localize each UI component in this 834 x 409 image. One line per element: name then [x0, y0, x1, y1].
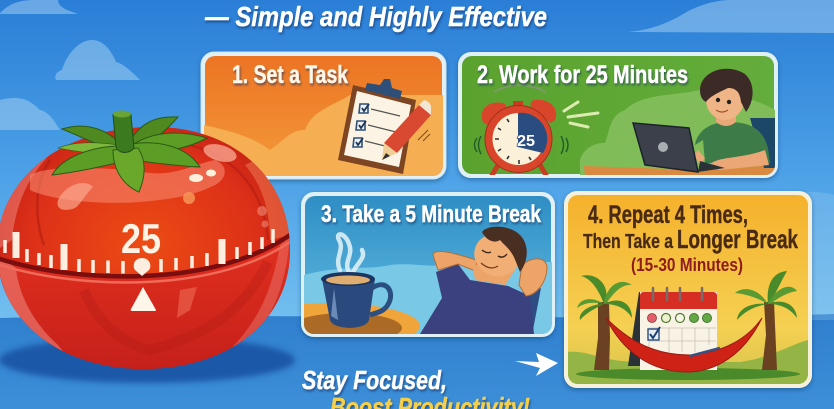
step 4 heading line 1: 4. Repeat 4 Times,: [588, 201, 748, 229]
tagline line 1: Stay Focused,: [302, 365, 447, 395]
subtitle: — Simple and Highly Effective: [204, 1, 547, 32]
panel: step 2 work for 25 minutes: [458, 52, 780, 178]
panel: step 1 set a task: [201, 52, 446, 180]
illustration: hammock: [606, 318, 762, 372]
panel: step 3 take a 5 minute break: [298, 192, 558, 341]
arrow: [515, 353, 558, 376]
dial number: 25: [121, 215, 161, 262]
timer tick marks: [5, 229, 273, 274]
illustration: ground: [568, 340, 808, 384]
tomato shadow: [0, 337, 295, 383]
illustration: table: [304, 303, 420, 334]
illustration: desk: [584, 166, 775, 175]
icon: clipboard: [338, 79, 431, 174]
icon: alarm clock: [474, 85, 598, 175]
illustration: boy with laptop: [633, 69, 780, 172]
icon: pencil: [382, 100, 431, 160]
tomato seam: [0, 235, 290, 276]
illustration: right palm: [735, 271, 797, 370]
dial pointer: [134, 258, 150, 276]
step 4 duration: (15-30 Minutes): [631, 255, 743, 275]
background clouds: [0, 0, 834, 320]
icon: coffee cup: [321, 234, 391, 328]
clock label: 25: [517, 133, 535, 150]
tomato lower half: [0, 236, 292, 372]
step 3 heading: 3. Take a 5 Minute Break: [321, 201, 542, 228]
tomato timer: [0, 110, 292, 372]
step 2 heading: 2. Work for 25 Minutes: [477, 61, 688, 89]
illustration: relaxing man: [420, 227, 547, 335]
illustration: left palm: [577, 275, 632, 370]
dial triangle: [131, 287, 156, 311]
step 4 heading line 2: Then Take a: [583, 231, 674, 253]
step 1 heading: 1. Set a Task: [232, 61, 348, 89]
tomato stem and leaves: [52, 110, 207, 192]
icon: calendar: [628, 288, 717, 370]
panel: step 4 repeat and longer break: [564, 191, 812, 388]
